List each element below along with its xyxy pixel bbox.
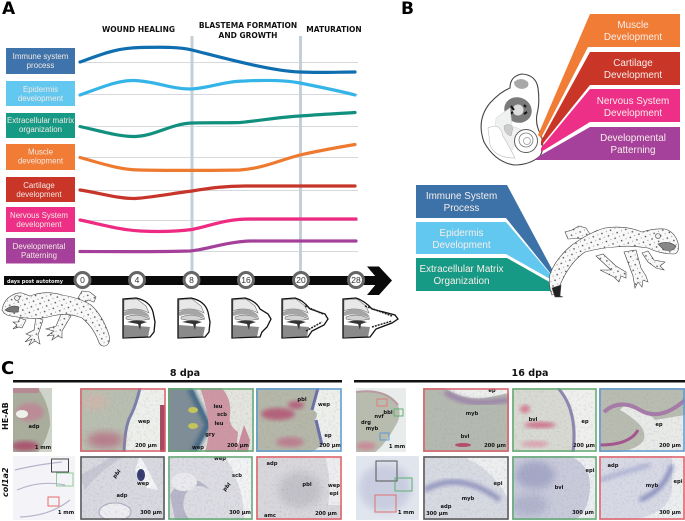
micrograph: 8 dpa HE red box — [80, 388, 166, 452]
epidermis development fan — [416, 222, 552, 280]
micrograph: 8 dpa HE red box: wep — [138, 419, 150, 425]
label: Extracellular matrix organization — [6, 113, 75, 138]
label: Muscle development: Muscle — [28, 148, 54, 156]
label: Developmental Patterning: Developmental — [13, 242, 66, 251]
heading 16 dpa: 16 dpa — [512, 368, 548, 379]
micrograph: 16 dpa col1a2 green box: bvl — [555, 485, 564, 491]
micrograph: 16 dpa col1a2 red box — [599, 456, 685, 520]
micrograph: 8 dpa HE blue box: pbl — [297, 397, 307, 403]
phase headings: BLASTEMA FORMATION — [199, 21, 297, 30]
label: Developmental Patterning: Patterning — [21, 251, 57, 260]
phase headings: WOUND HEALING — [102, 25, 175, 34]
micrograph: 16 dpa col1a2 dark box: adp — [441, 504, 452, 510]
timeline arrow: 16 — [241, 275, 251, 285]
micrograph: 8 dpa col1a2 red box — [256, 456, 342, 520]
label: Nervous System development: development — [16, 220, 62, 229]
developmental patterning fan — [535, 127, 680, 160]
immune system process fan: Immune System — [426, 191, 497, 202]
micrograph: 8 dpa col1a2 red box: 200 µm — [315, 511, 337, 517]
micrograph: 16 dpa col1a2 green box: epi — [585, 468, 595, 474]
tissue schematic 16 dpa — [232, 298, 271, 338]
micrograph: 8 dpa HE green box: gry — [205, 432, 215, 438]
micrograph: 16 dpa HE green box: bvl — [529, 417, 538, 423]
muscle development fan: Muscle — [617, 20, 649, 31]
micrograph: 16 dpa HE green box: ep — [581, 419, 589, 425]
micrograph: 16 dpa col1a2 red box: myb — [646, 483, 659, 489]
micrograph: 8 dpa col1a2 green box: pbl — [222, 482, 233, 493]
micrograph: 8 dpa col1a2 green box — [168, 456, 253, 520]
label: Cartilage development — [6, 177, 75, 202]
micrograph: 8 dpa col1a2 dark box: 300 µm — [140, 510, 162, 516]
chart: expression curves — [79, 36, 358, 272]
micrograph: 8 dpa col1a2 overview: 1 mm — [58, 510, 74, 516]
micrograph: 16 dpa col1a2 red box: 300 µm — [659, 510, 681, 516]
label: Nervous System development: Nervous System — [10, 211, 68, 220]
micrograph: 16 dpa HE overview: nvf — [374, 414, 384, 420]
timeline arrow: 28 — [351, 275, 361, 285]
timeline arrow: days post autotomy — [7, 279, 64, 285]
micrograph: 8 dpa col1a2 red box: adp — [267, 461, 278, 467]
micrograph: 16 dpa HE overview: myb — [366, 426, 379, 432]
micrograph: 16 dpa col1a2 overview — [356, 456, 419, 520]
micrograph: 8 dpa col1a2 green box: 300 µm — [229, 510, 251, 516]
micrograph: 8 dpa HE green box: wep — [192, 445, 204, 451]
micrograph: 16 dpa HE blue box: 200 µm — [659, 443, 681, 449]
timeline arrow: 4 — [135, 275, 140, 285]
micrograph: 16 dpa col1a2 green box — [512, 456, 597, 520]
tissue schematic 20 dpa — [282, 298, 328, 338]
timeline arrow: 0 — [80, 275, 85, 285]
extracellular matrix organization fan: Extracellular Matrix — [420, 264, 504, 275]
cartilage development fan: Cartilage — [613, 58, 653, 69]
label: Epidermis development: Epidermis — [23, 85, 58, 94]
gecko illustration right — [549, 226, 678, 297]
timeline arrow: 20 — [296, 275, 306, 285]
micrograph: 8 dpa col1a2 red box: pbl — [302, 482, 312, 488]
micrograph: 8 dpa col1a2 red box: epi — [329, 491, 339, 497]
phase headings — [102, 21, 362, 40]
label: Epidermis development: development — [18, 94, 64, 103]
nervous system development fan — [541, 89, 680, 152]
micrograph: 16 dpa HE overview: bbl — [383, 410, 393, 416]
panel letter C: C — [1, 358, 14, 379]
micrograph: 16 dpa HE red box: 200 µm — [484, 443, 506, 449]
label: Muscle development: development — [18, 156, 64, 166]
micrograph: 8 dpa col1a2 dark box: wep — [137, 481, 149, 487]
muscle development fan — [538, 14, 680, 138]
immune system process fan — [416, 185, 553, 274]
micrograph: 8 dpa HE green box: scb — [217, 412, 227, 418]
label: Immune system process — [6, 48, 75, 74]
developmental patterning fan: Developmental — [600, 133, 666, 144]
panel B: lower fan of labels — [416, 185, 556, 291]
micrograph: 16 dpa HE red box: bvl — [461, 434, 470, 440]
micrograph: 8 dpa HE overview: 1 mm — [35, 445, 51, 451]
label: Nervous System development — [6, 207, 75, 232]
micrograph: 8 dpa HE green box: leu — [214, 421, 224, 427]
label: Epidermis development — [6, 81, 75, 106]
label: Developmental Patterning — [6, 238, 75, 264]
micrograph: 16 dpa HE red box: myb — [466, 411, 479, 417]
micrograph: 8 dpa col1a2 dark box: adp — [117, 493, 128, 499]
panel B: upper fan of labels — [535, 14, 680, 160]
micrograph: 8 dpa HE overview — [11, 388, 52, 452]
micrograph: 16 dpa HE red box: ep — [488, 388, 496, 394]
micrograph: 8 dpa col1a2 red box: amc — [264, 513, 276, 519]
micrograph: 8 dpa HE blue box — [256, 388, 342, 452]
developmental patterning fan: Patterning — [610, 145, 656, 156]
extracellular matrix organization fan — [416, 258, 556, 291]
label: Cartilage development: development — [16, 190, 62, 199]
micrograph: 8 dpa HE blue box: wep — [318, 402, 330, 408]
micrograph: 8 dpa HE green box: leu — [214, 404, 223, 410]
micrograph: 8 dpa col1a2 red box: wep — [328, 483, 340, 489]
micrograph: 16 dpa col1a2 dark box — [423, 456, 509, 520]
micrograph: 8 dpa HE red box: 200 µm — [135, 443, 157, 449]
micrograph: 16 dpa HE green box — [512, 388, 597, 452]
micrograph: 8 dpa HE overview: adp — [29, 424, 40, 430]
gecko illustration left — [2, 291, 110, 346]
micrograph: 8 dpa HE green box: 200 µm — [227, 443, 249, 449]
label: Extracellular matrix organization: Extracellular matrix — [7, 116, 74, 125]
immune system process fan: Process — [444, 203, 479, 214]
micrograph: 16 dpa HE blue box — [599, 388, 685, 452]
micrograph: 16 dpa HE green box: 200 µm — [573, 443, 595, 449]
phase headings: AND GROWTH — [219, 31, 277, 40]
micrograph: 16 dpa col1a2 green box: 300 µm — [572, 510, 594, 516]
label: Extracellular matrix organization: organization — [19, 125, 62, 134]
embryo illustration — [481, 74, 543, 165]
micrograph: 8 dpa HE blue box: ep — [324, 433, 332, 439]
micrograph: 16 dpa col1a2 dark box: epi — [493, 481, 503, 487]
micrograph: 8 dpa col1a2 green box: scb — [232, 473, 242, 479]
micrograph: 16 dpa HE overview — [356, 388, 406, 452]
phase headings: MATURATION — [306, 25, 362, 34]
muscle development fan: Development — [604, 32, 662, 43]
micrograph: 16 dpa col1a2 dark box: 300 µm — [426, 511, 448, 517]
label: Muscle development — [6, 144, 75, 170]
micrograph: 8 dpa col1a2 dark box — [80, 456, 165, 521]
row label HE-AB: HE-AB — [1, 402, 10, 430]
row label col1a2: col1a2 — [1, 467, 10, 497]
heading 8 dpa: 8 dpa — [170, 368, 200, 379]
timeline arrow — [4, 266, 392, 295]
timeline arrow: 8 — [189, 275, 194, 285]
tissue schematic 8 dpa — [178, 298, 210, 338]
epidermis development fan: Development — [432, 240, 491, 251]
micrograph: 8 dpa col1a2 dark box: pbl — [112, 469, 123, 480]
cartilage development fan — [541, 52, 680, 146]
micrograph: 16 dpa HE blue box: ep — [655, 422, 663, 428]
micrograph: 16 dpa col1a2 dark box: myb — [462, 496, 475, 502]
micrograph: 16 dpa HE red box — [423, 388, 509, 452]
label: Immune system process: Immune system — [13, 52, 69, 61]
nervous system development fan: Nervous System — [597, 96, 669, 107]
cartilage development fan: Development — [604, 70, 662, 81]
micrograph: 8 dpa HE blue box: 200 µm — [319, 443, 341, 449]
micrograph: 16 dpa col1a2 red box: adp — [608, 463, 619, 469]
epidermis development fan: Epidermis — [440, 228, 484, 239]
label: Immune system process: process — [27, 61, 54, 70]
micrograph: 8 dpa HE green box — [168, 388, 254, 452]
label: Cartilage development: Cartilage — [23, 181, 55, 190]
nervous system development fan: Development — [604, 108, 662, 119]
tissue schematic 4 dpa — [123, 298, 155, 338]
extracellular matrix organization fan: Organization — [434, 276, 490, 287]
micrograph: 16 dpa HE overview: 1 mm — [389, 444, 405, 450]
micrograph: 16 dpa HE overview: drg — [361, 420, 371, 426]
micrograph: 16 dpa col1a2 red box: epi — [673, 479, 683, 485]
micrograph: 8 dpa col1a2 green box: wep — [214, 456, 226, 462]
tissue schematic 28 dpa — [343, 298, 398, 338]
micrograph: 8 dpa col1a2 overview — [13, 456, 75, 520]
micrograph: 16 dpa col1a2 overview: 1 mm — [398, 510, 414, 516]
